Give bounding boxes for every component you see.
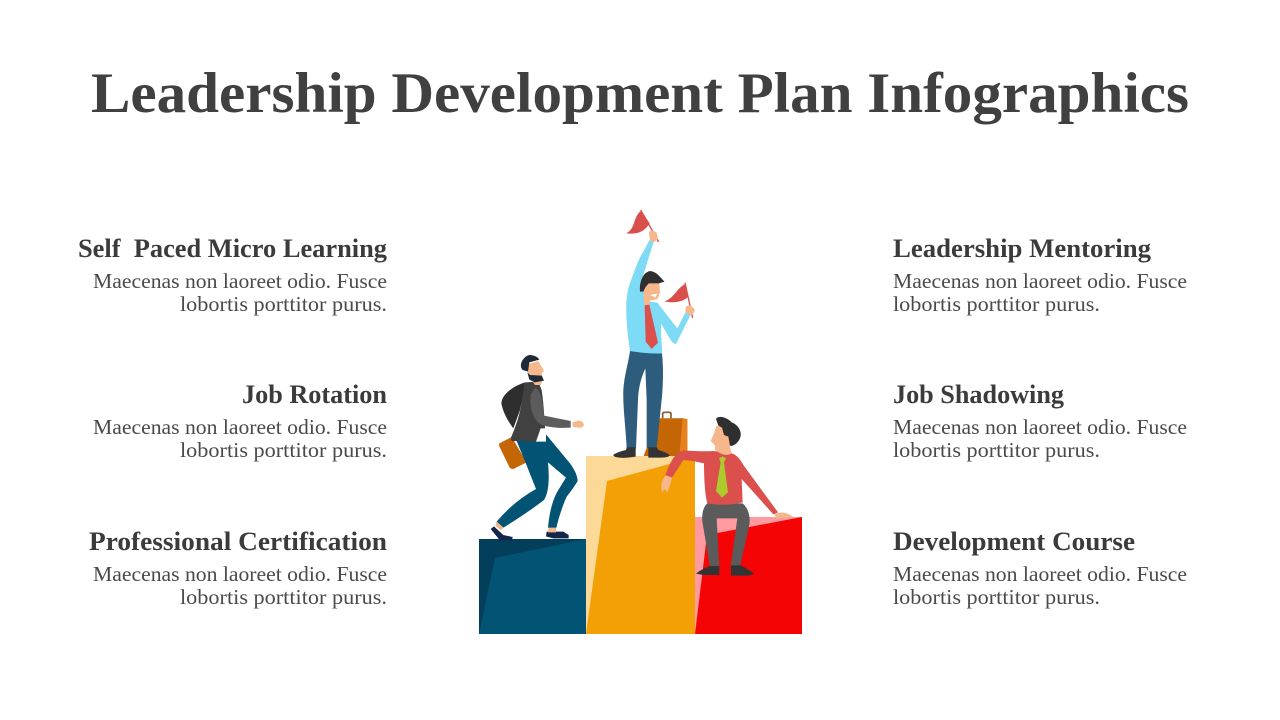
text block: Development Course: lobortis porttitor purus. xyxy=(893,585,1100,609)
tie xyxy=(716,456,728,498)
text block: Leadership Mentoring: Maecenas non laoreet odio. Fusce xyxy=(893,269,1187,293)
podium: right red block xyxy=(695,517,802,634)
text block: Job Shadowing xyxy=(893,380,1187,462)
text block: Professional Certification: lobortis porttitor purus. xyxy=(180,585,387,609)
text block: Job Rotation: Job Rotation xyxy=(242,380,388,409)
text block: Professional Certification: Professional Certification xyxy=(89,527,388,556)
icon: briefcase on podium xyxy=(643,412,687,457)
figure: man with two flags xyxy=(613,210,695,458)
text block: Job Shadowing: Job Shadowing xyxy=(893,380,1064,409)
title: Leadership Development Plan Infographics xyxy=(91,62,1189,125)
text block: Development Course xyxy=(893,527,1187,609)
icon: briefcase xyxy=(499,437,527,469)
podium: centre orange block xyxy=(586,456,695,634)
text block: Self Paced Micro Learning: lobortis porttitor purus. xyxy=(180,292,387,316)
text block: Self Paced Micro Learning: Maecenas non laoreet odio. Fusce xyxy=(93,269,387,293)
text block: Leadership Mentoring: Leadership Mentoring xyxy=(893,234,1151,263)
text block: Job Rotation: lobortis porttitor purus. xyxy=(180,438,387,462)
text block: Job Shadowing: lobortis porttitor purus. xyxy=(893,438,1100,462)
text block: Job Rotation: Maecenas non laoreet odio. Fusce xyxy=(93,415,387,439)
text block: Self Paced Micro Learning xyxy=(78,234,387,316)
figure: seated man xyxy=(661,417,793,576)
illustration: leaders on podium xyxy=(479,210,802,634)
text block: Professional Certification xyxy=(89,527,388,609)
text block: Self Paced Micro Learning: Self Paced Micro Learning xyxy=(78,234,387,263)
icon: right flag xyxy=(664,283,693,318)
icon: left flag xyxy=(626,210,659,242)
text block: Development Course: Development Course xyxy=(893,527,1135,556)
podium: left blue block xyxy=(479,539,586,634)
text block: Development Course: Maecenas non laoreet odio. Fusce xyxy=(893,562,1187,586)
tie xyxy=(645,305,658,349)
text block: Leadership Mentoring: lobortis porttitor purus. xyxy=(893,292,1100,316)
figure: man walking with briefcase xyxy=(491,355,584,540)
text block: Job Rotation xyxy=(93,380,388,462)
text block: Job Shadowing: Maecenas non laoreet odio. Fusce xyxy=(893,415,1187,439)
text block: Professional Certification: Maecenas non laoreet odio. Fusce xyxy=(93,562,387,586)
text block: Leadership Mentoring xyxy=(893,234,1187,316)
